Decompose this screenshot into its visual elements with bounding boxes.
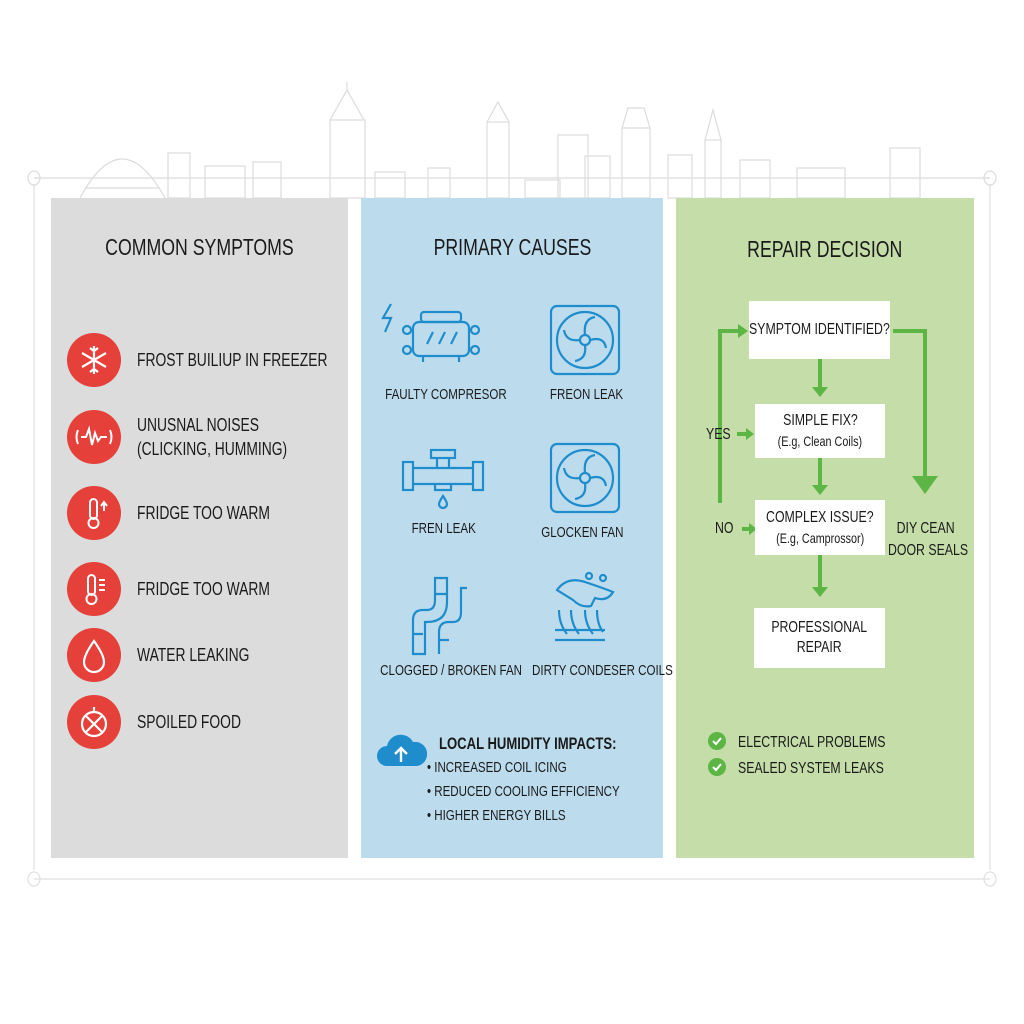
symptom: fridge too warm: FRIDGE TOO WARM	[137, 503, 270, 523]
box: complex issue: COMPLEX ISSUE?	[766, 508, 874, 526]
label: no: NO	[715, 520, 733, 537]
label: clogged broken fan: CLOGGED / BROKEN FAN	[380, 662, 522, 679]
label: faulty compressor: FAULTY COMPRESOR	[385, 386, 507, 403]
box: simple fix: (E.g, Clean Coils)	[778, 433, 862, 449]
label: diy clean door seals: DOOR SEALS	[888, 542, 968, 559]
panel: primary causes	[361, 198, 663, 858]
symptom: water leaking	[67, 628, 249, 682]
box: simple fix: SIMPLE FIX?	[783, 412, 857, 429]
label: dirty condenser coils: DIRTY CONDESER COILS	[532, 662, 673, 679]
box: symptom identified: SYMPTOM IDENTIFIED?	[749, 321, 890, 338]
frame side lines	[28, 184, 996, 886]
flowchart arrows	[718, 324, 938, 597]
icon: freon leak fan	[550, 304, 620, 376]
icon: clogged pipes	[412, 576, 467, 656]
heading: common symptoms: COMMON SYMPTOMS	[105, 234, 294, 260]
label: diy clean door seals: DIY CEAN	[897, 520, 955, 537]
panel: repair decision	[676, 198, 974, 858]
label: freon leak: FREON LEAK	[550, 386, 624, 403]
box: complex issue	[755, 500, 885, 555]
panel: common symptoms	[51, 198, 348, 858]
symptom: fridge too warm	[67, 486, 270, 540]
skyline background	[28, 82, 996, 198]
heading: primary causes: PRIMARY CAUSES	[433, 234, 591, 260]
symptom: unusual noises: UNUSNAL NOISES	[137, 415, 259, 435]
heading: local humidity: LOCAL HUMIDITY IMPACTS:	[439, 734, 616, 753]
bullet list: • REDUCED COOLING EFFICIENCY	[427, 783, 620, 800]
symptom: unusual noises: (CLICKING, HUMMING)	[137, 439, 287, 459]
heading: repair decision: REPAIR DECISION	[747, 236, 903, 262]
symptom: spoiled food: SPOILED FOOD	[137, 712, 241, 732]
label: fren leak: FREN LEAK	[412, 520, 476, 537]
symptom: frost buildup	[67, 333, 327, 387]
bullet list: • HIGHER ENERGY BILLS	[427, 807, 566, 824]
box: complex issue: (E.g, Camprossor)	[776, 530, 864, 546]
icon: faulty compressor	[381, 304, 480, 362]
icon: broken fan	[550, 442, 620, 514]
label: yes: YES	[706, 426, 731, 443]
item: sealed system leaks: SEALED SYSTEM LEAKS	[738, 760, 884, 777]
box: symptom identified	[749, 301, 890, 359]
symptom: spoiled food	[67, 695, 241, 749]
icon: cloud	[377, 734, 427, 766]
symptom: water leaking: WATER LEAKING	[137, 645, 249, 665]
humidity block	[377, 734, 620, 824]
symptom: fridge too warm 2	[67, 562, 270, 616]
box: professional repair	[754, 608, 885, 668]
bullet list: • INCREASED COIL ICING	[427, 759, 567, 776]
box: professional repair: PROFESSIONAL	[772, 619, 867, 636]
symptom: frost buildup: FROST BUILIUP IN FREEZER	[137, 350, 327, 370]
box: professional repair: REPAIR	[797, 639, 842, 656]
label: diy clean door seals	[888, 520, 968, 559]
bullet list	[427, 759, 620, 824]
item: electrical problems: ELECTRICAL PROBLEMS	[738, 734, 885, 751]
icon: dirty coils	[555, 572, 614, 642]
symptom: unusual noises	[67, 410, 287, 464]
label: glocken fan: GLOCKEN FAN	[541, 524, 623, 541]
box: simple fix	[755, 404, 885, 458]
checklist	[708, 732, 885, 777]
symptom: fridge too warm 2: FRIDGE TOO WARM	[137, 579, 270, 599]
icon: pipe leak	[402, 448, 484, 510]
